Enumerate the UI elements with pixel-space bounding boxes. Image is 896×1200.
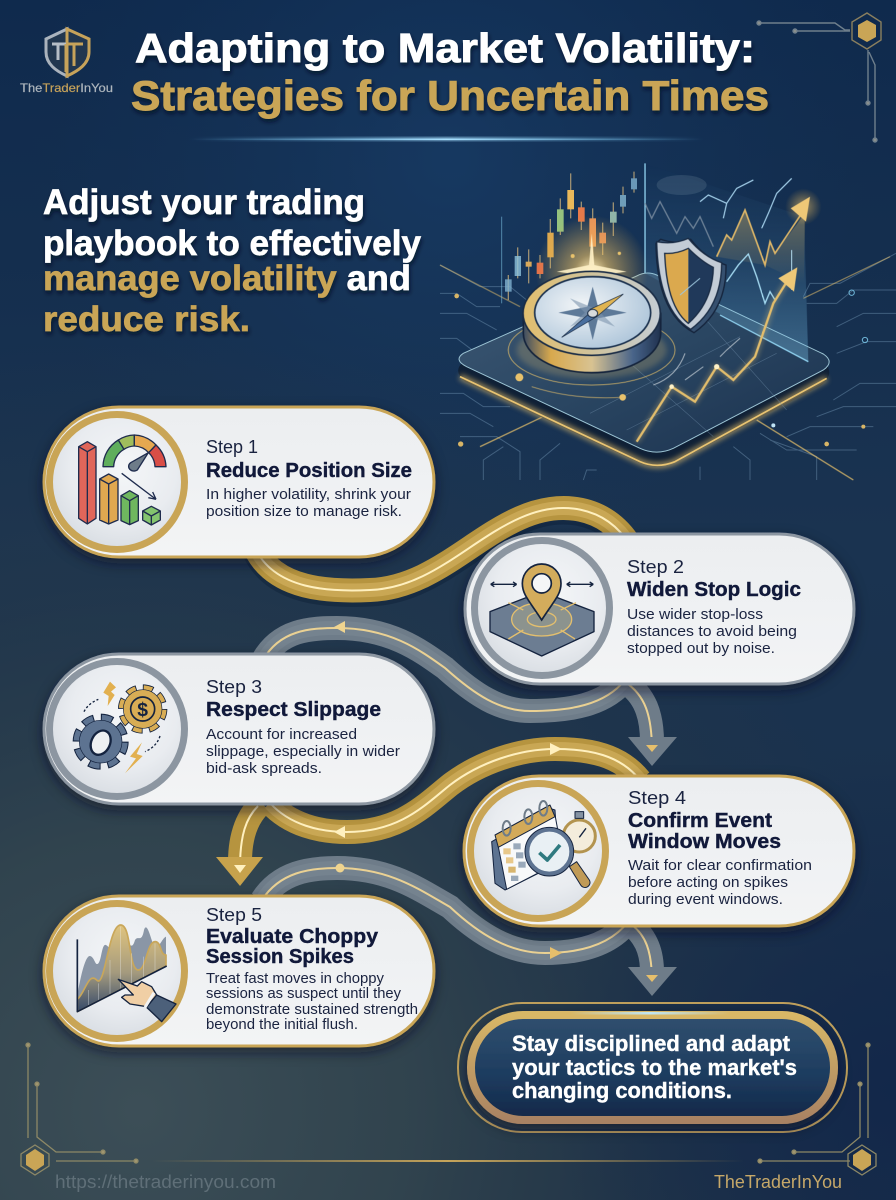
- subheading: Adjust your trading: [43, 183, 365, 222]
- step 5 text: sessions as suspect until they: [206, 985, 401, 1002]
- logo: TheTraderInYou shield: TheTraderInYou: [20, 81, 113, 95]
- step 4 text: Step 4: [628, 788, 686, 808]
- step 3 text: slippage, especially in wider: [206, 743, 400, 760]
- panel: step 2: [465, 534, 854, 684]
- step 2 text: [627, 557, 801, 657]
- step 2 text: distances to avoid being: [627, 623, 797, 640]
- circuit decoration: bottom right: [758, 1043, 876, 1175]
- step 3 text: bid-ask spreads.: [206, 760, 322, 777]
- flow ribbon: step 5 to step 4 with arrow to closing callout: [262, 864, 677, 996]
- candlestick chart: [505, 172, 637, 300]
- footer: brand name: TheTraderInYou: [714, 1172, 842, 1192]
- callout: closing message: [458, 1003, 847, 1132]
- icon: choppy chart with pointing hand: [77, 925, 176, 1022]
- icon: calendar, stopwatch, magnifier: [492, 801, 595, 890]
- step 1 text: [206, 437, 412, 520]
- callout: closing message: changing conditions.: [512, 1078, 732, 1103]
- panel: step 3: [44, 654, 434, 804]
- orbit rings: [508, 315, 675, 385]
- flow ribbon: step 2 to step 3 with arrow to step 4: [263, 621, 677, 766]
- step 3 text: Respect Slippage: [206, 699, 381, 721]
- icon: map pin on hexagon with arrows: [490, 564, 594, 656]
- subheading: playbook to effectively: [43, 224, 422, 263]
- step 5 text: beyond the initial flush.: [206, 1016, 358, 1033]
- panel: step 4: [464, 776, 854, 926]
- step 4 text: [628, 788, 812, 908]
- callout: closing message: Stay disciplined and adapt: [512, 1031, 791, 1056]
- step 2 text: Widen Stop Logic: [627, 579, 801, 601]
- icon: gears with lightning: [78, 682, 163, 773]
- step 4 text: Window Moves: [628, 831, 781, 853]
- rising gold arrow: [637, 267, 797, 442]
- title: Adapting to Market Volatility:: [135, 25, 755, 71]
- step 3 text: Account for increased: [206, 726, 357, 743]
- step 4 text: before acting on spikes: [628, 874, 788, 891]
- step 4 text: Wait for clear confirmation: [628, 857, 812, 874]
- icon: shrinking bars with gauge: [79, 435, 166, 525]
- step 5 text: [206, 905, 418, 1033]
- step 4 text: during event windows.: [628, 891, 783, 908]
- step 1 text: Reduce Position Size: [206, 460, 412, 482]
- step 2 text: stopped out by noise.: [627, 640, 775, 657]
- panel: step 5: [44, 896, 434, 1046]
- panel: step 1: [44, 407, 434, 557]
- title: Strategies for Uncertain Times: [131, 72, 769, 119]
- step 2 text: Step 2: [627, 557, 684, 577]
- hero illustration: compass, shield and rising charts on platform: [440, 163, 896, 480]
- circuit decoration: top right: [757, 13, 881, 142]
- step 5 text: demonstrate sustained strength: [206, 1001, 418, 1018]
- footer: website url: https://thetraderinyou.com: [55, 1172, 276, 1192]
- icon: gears with lightning: $: [137, 700, 148, 721]
- step 1 text: In higher volatility, shrink your: [206, 486, 411, 503]
- step 5 text: Step 5: [206, 905, 262, 925]
- subheading: [43, 183, 422, 339]
- logo: TheTraderInYou shield: [20, 29, 113, 95]
- platform: [458, 273, 829, 467]
- step 5 text: Treat fast moves in choppy: [206, 970, 384, 987]
- subheading: manage volatility and: [43, 259, 411, 298]
- flow ribbon: step 1 to step 2: [255, 508, 630, 595]
- callout: closing message: your tactics to the market's: [512, 1055, 797, 1080]
- volatility chart panel with storm and lightning: [645, 163, 822, 362]
- compass: [523, 271, 661, 373]
- step 5 text: Session Spikes: [206, 946, 354, 968]
- shield: [656, 238, 726, 333]
- step 3 text: [206, 677, 400, 777]
- title: [131, 25, 769, 119]
- step 2 text: Use wider stop-loss: [627, 606, 763, 623]
- step 4 text: Confirm Event: [628, 810, 772, 832]
- flare above compass: [535, 215, 648, 328]
- step 1 text: Step 1: [206, 437, 258, 457]
- circuit decoration: bottom left: [21, 1043, 138, 1175]
- circuit traces around platform: [440, 253, 896, 480]
- flow ribbon: step 4 to step 3 with arrow to step 5: [216, 743, 640, 886]
- step 3 text: Step 3: [206, 677, 262, 697]
- step 1 text: position size to manage risk.: [206, 503, 402, 520]
- subheading: reduce risk.: [43, 300, 250, 339]
- step 5 text: Evaluate Choppy: [206, 926, 379, 948]
